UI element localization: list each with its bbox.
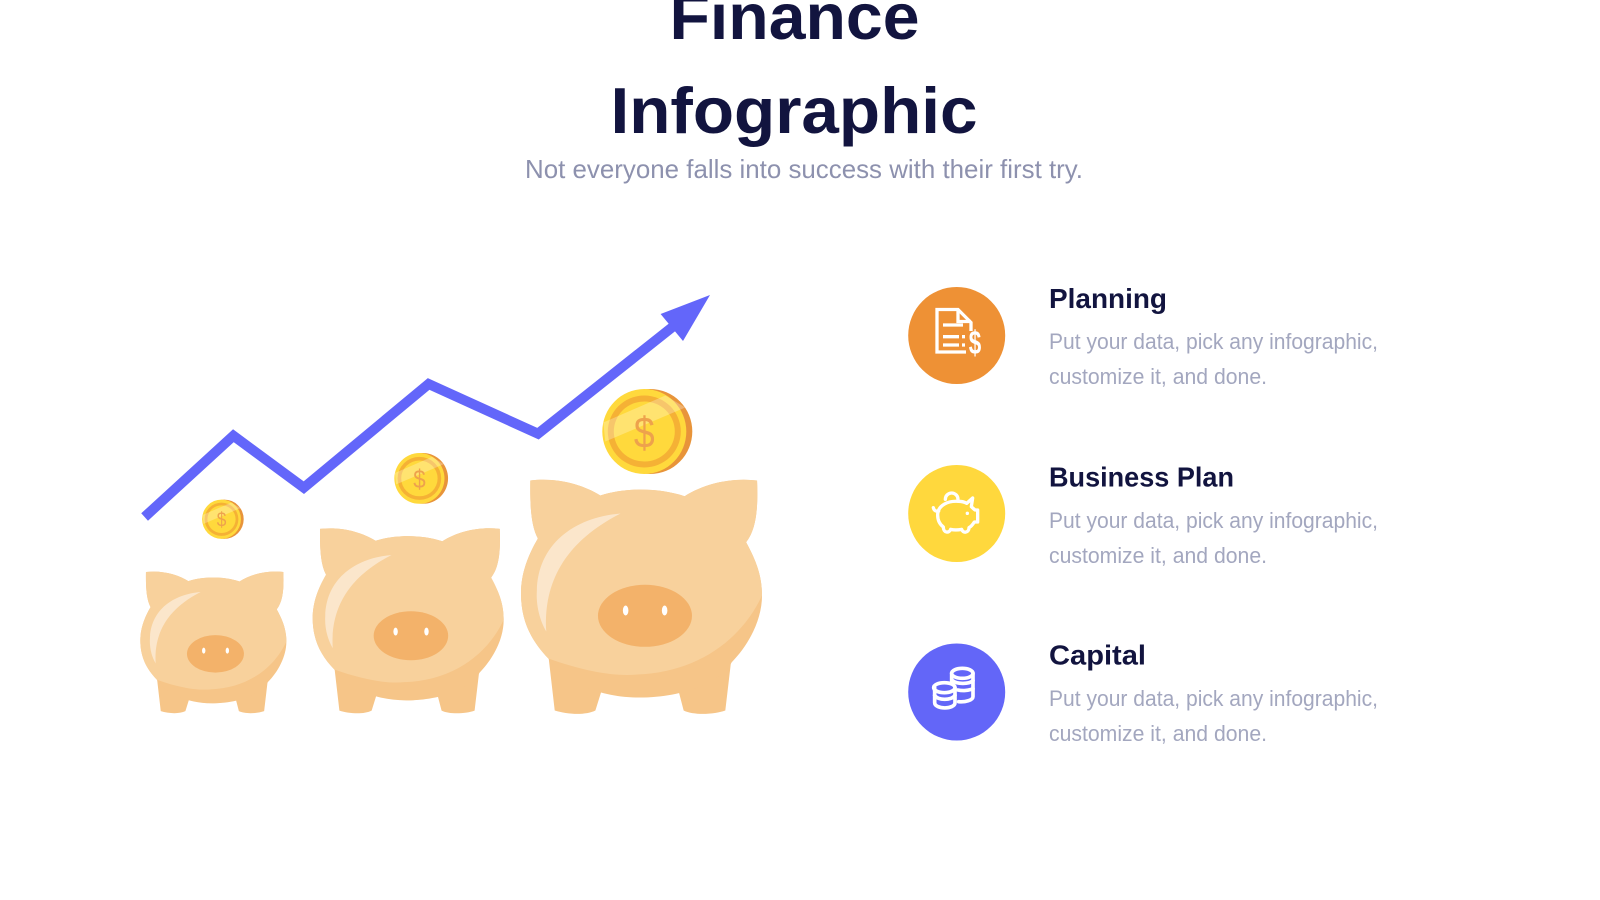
large coin: $ [634,408,655,457]
text: capital description: customize it, and done. [1049,721,1267,746]
large piggy bank [521,480,762,714]
text: planning description [1049,329,1378,389]
title [610,0,978,147]
panel: planning [908,283,1378,389]
text: business plan description: customize it, and done. [1049,543,1267,568]
heading: capital: Capital [1049,640,1146,670]
text: business plan description [1049,508,1378,568]
medium piggy bank [313,528,504,713]
small coin: $ [217,508,227,531]
heading: planning: Planning [1049,283,1167,314]
icon: coin stacks [908,644,1005,740]
text: capital description [1049,686,1378,746]
medium coin: $ [413,465,426,494]
text: planning description: Put your data, pick any infographic, [1049,329,1378,354]
heading: business plan: Business Plan [1049,462,1234,492]
text: capital description: Put your data, pick any infographic, [1049,686,1378,711]
illustration: piggy banks and growth chart [140,295,762,714]
icon: piggy bank [908,465,1005,562]
large coin [602,389,692,474]
text: business plan description: Put your data, pick any infographic, [1049,508,1378,533]
medium coin [394,453,448,504]
subtitle: Not everyone falls into success with their first try. [525,154,1083,184]
title: Infographic [610,74,978,147]
icon: finance document: $ [969,324,981,361]
panel: capital [908,640,1378,746]
text: planning description: customize it, and done. [1049,364,1267,389]
arrow: rising growth line [145,295,710,517]
small coin [202,500,244,539]
small piggy bank [140,572,286,713]
panel: business plan [908,462,1378,568]
icon: finance document [908,287,1005,384]
